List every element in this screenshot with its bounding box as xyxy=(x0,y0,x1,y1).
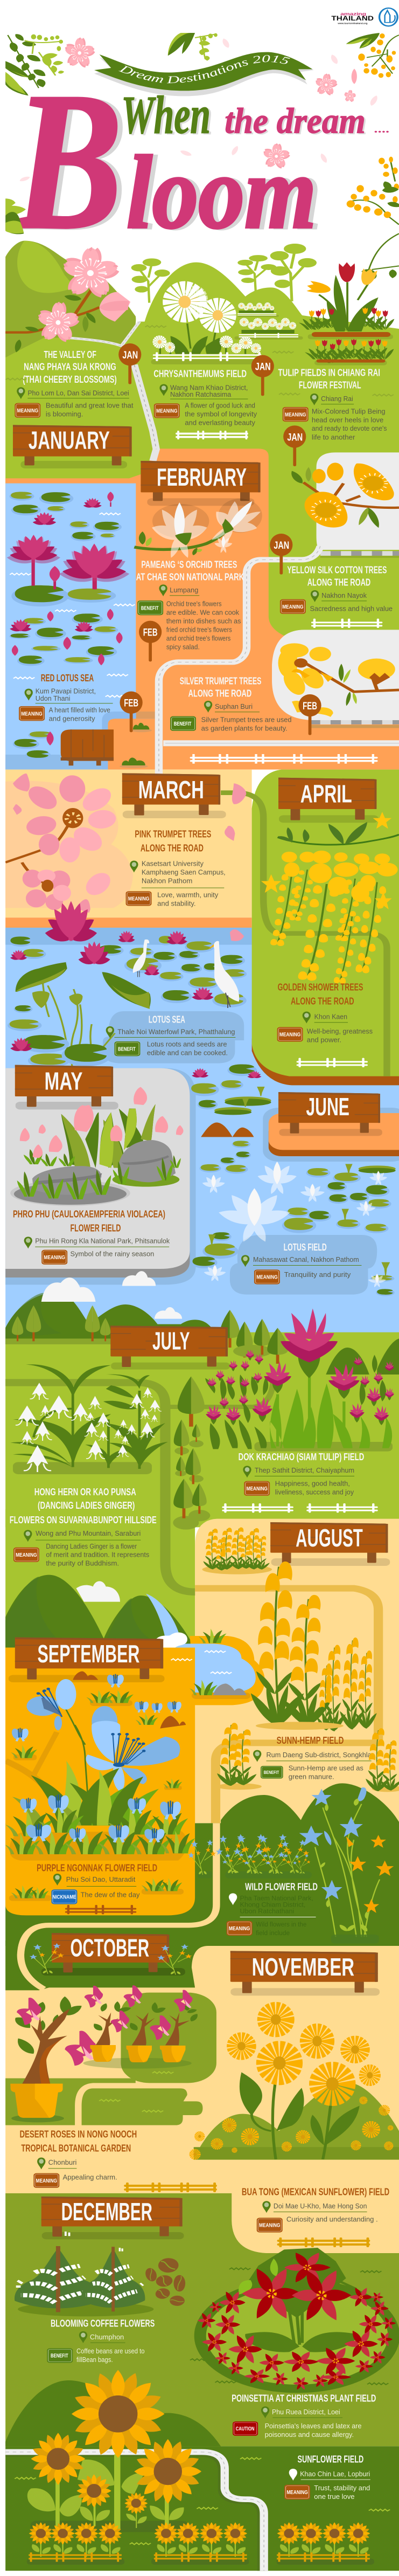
icon: silver trumpet flowers xyxy=(278,643,399,706)
meaning: red lotus: A heart filled with love xyxy=(49,706,110,714)
heading: ginger: (DANCING LADIES GINGER) xyxy=(38,1500,135,1511)
month pin: JAN: JAN xyxy=(274,540,289,551)
fence: brown xyxy=(65,1905,136,1914)
sign: May: MAY xyxy=(44,1068,82,1095)
sign: March xyxy=(122,773,226,818)
icon: poinsettia wreath xyxy=(198,2248,396,2391)
meaning: chrysanthemums: A flower of good luck and xyxy=(185,402,255,410)
benefit: silver trumpet: BENEFIT xyxy=(174,721,192,727)
benefit: coffee: Coffee beans are used to xyxy=(76,2347,145,2355)
fence xyxy=(176,431,248,439)
panel: October and November: DESERT ROSES IN NONG NOOCH xyxy=(19,2129,137,2140)
sign: September: SEPTEMBER xyxy=(38,1640,139,1668)
benefit: orchid: BENEFIT xyxy=(141,605,159,611)
sign: February: FEBRUARY xyxy=(157,464,247,491)
logo: Amazing Thailand: www.tourismthailand.org xyxy=(337,22,368,24)
location: wild flower: Pha Taem National Park, xyxy=(240,1895,313,1902)
location: orchid xyxy=(159,584,199,596)
panel: lotus sea text: BENEFIT xyxy=(118,1046,136,1052)
location: sunn hemp xyxy=(253,1750,372,1762)
panel: February: SILVER TRUMPET TREES xyxy=(180,675,261,686)
location: poinsettia: Phu Ruea District, Loei xyxy=(272,2408,340,2416)
location: ngonnak xyxy=(53,1874,136,1887)
panel: August xyxy=(9,1522,390,1733)
meaning: desert roses: MEANING xyxy=(36,2178,57,2184)
sign: June xyxy=(278,1092,382,1136)
sign: May xyxy=(15,1065,118,1109)
icon: decor waves xyxy=(190,2268,388,2385)
meaning: chrysanthemums xyxy=(154,402,257,427)
panel: May and June xyxy=(9,1065,396,1319)
location: coffee xyxy=(79,2331,125,2343)
leaves: mid left xyxy=(5,198,26,234)
logo: seal xyxy=(380,8,397,26)
meaning: sunflower: Trust, stability and xyxy=(314,2484,370,2492)
location: wild flower: Ubon Ratchathani xyxy=(240,1908,294,1915)
heading: pink trumpet xyxy=(135,828,211,853)
benefit: silver trumpet: as garden plants for beauty. xyxy=(201,724,288,733)
panel: Sunflower xyxy=(3,2370,390,2573)
leaves: top left xyxy=(5,33,65,95)
location: chrysanthemums: Wang Nam Khiao District, xyxy=(170,383,248,392)
sign: March: MARCH xyxy=(138,776,204,804)
panel: March and April xyxy=(5,773,399,1079)
location: ngonnak: Phu Soi Dao, Uttaradit xyxy=(66,1875,136,1883)
icon: siam tulips xyxy=(205,1309,394,1452)
title: When the dream xyxy=(123,95,389,135)
location: silver trumpet: Suphan Buri xyxy=(215,702,253,710)
location: pink trumpet: Kasetsart University xyxy=(142,860,204,868)
title: Bloom: B xyxy=(17,52,128,271)
location: phro phu: Phu Hin Rong Kla National Park, Phitsanulok xyxy=(35,1237,170,1245)
location: desert roses: Chonburi xyxy=(48,2158,76,2166)
icon: sunflower rows xyxy=(27,2522,374,2565)
heading: ginger: HONG HERN OR KAO PUNSA xyxy=(34,1486,136,1497)
benefit: sunn hemp: BENEFIT xyxy=(264,1770,279,1776)
meaning: bua tong xyxy=(257,2215,378,2233)
icon: decor waves xyxy=(15,2457,390,2545)
icon: wooden dock xyxy=(61,729,114,765)
road xyxy=(3,2452,264,2573)
heading: ginger xyxy=(10,1486,157,1525)
icon: big sunflowers xyxy=(27,2370,201,2532)
location: desert roses xyxy=(37,2158,76,2170)
location: valley: Pho Lom Lo, Dan Sai District, Loei xyxy=(27,389,129,397)
benefit: orchid: and orchid tree's flowers xyxy=(166,634,230,643)
sign: August xyxy=(270,1522,390,1566)
heading: silk cotton xyxy=(287,564,387,588)
sign: February xyxy=(141,461,261,506)
location: golden shower: Khon Kaen xyxy=(314,1013,347,1021)
fence: gold xyxy=(124,2183,217,2192)
heading: tulips xyxy=(278,369,380,388)
benefit: orchid: fried orchid tree's flowers xyxy=(166,625,232,634)
meaning: pink trumpet xyxy=(126,891,219,908)
meaning: phro phu: Symbol of the rainy season xyxy=(70,1250,154,1258)
benefit: coffee: BENEFIT xyxy=(51,2353,68,2359)
icon: clouds xyxy=(41,1271,182,1319)
month pin: JAN xyxy=(118,343,141,384)
icon: sunn hemp large xyxy=(247,1562,378,1733)
panel: lotus field text: LOTUS FIELD xyxy=(284,1241,327,1253)
icon: trees xyxy=(12,1306,288,1530)
meaning: silk cotton xyxy=(280,599,393,614)
icon: waves xyxy=(99,2071,173,2112)
icon: pink blossom xyxy=(65,37,95,68)
location: phro phu xyxy=(24,1237,170,1248)
panel: January xyxy=(5,244,394,468)
meaning: red lotus: MEANING xyxy=(21,710,43,717)
benefit: orchid: them into dishes such as xyxy=(166,617,241,625)
title: When the dream: When xyxy=(121,85,211,144)
icon: grass and small blue flowers xyxy=(5,1745,195,1861)
location: silver trumpet xyxy=(204,701,260,713)
meaning: pink trumpet: and stability. xyxy=(157,900,196,908)
meaning: ginger: MEANING xyxy=(16,1552,37,1558)
location: coffee: Chumphon xyxy=(90,2333,124,2341)
meaning: desert roses: Appealing charm. xyxy=(63,2173,117,2181)
heading: phro phu xyxy=(13,1208,165,1233)
panel: lotus sea text: Lotus roots and seeds are xyxy=(147,1040,227,1048)
month pin: FEB: FEB xyxy=(143,627,158,639)
location: red lotus: Kum Pavapi District, xyxy=(36,687,96,695)
panel: September xyxy=(5,1679,399,1944)
heading: valley: THE VALLEY OF xyxy=(44,349,96,360)
meaning: tulips xyxy=(283,407,387,441)
meaning: ginger: Dancing Ladies Ginger is a flower xyxy=(46,1542,137,1550)
meaning: silk cotton: MEANING xyxy=(282,604,304,610)
meaning: dok krachiao: liveliness, success and joy xyxy=(275,1488,354,1496)
month pin: FEB: FEB xyxy=(124,697,138,709)
meaning: ginger xyxy=(13,1542,149,1567)
month pin: FEB xyxy=(120,692,143,732)
panel: lotus field text: Tranquility and purity xyxy=(284,1270,351,1279)
meaning: dok krachiao: Happiness, good health, xyxy=(275,1480,350,1488)
benefit: sunn hemp: green manure. xyxy=(289,1773,334,1781)
panel: February xyxy=(6,461,399,775)
icon: pink trumpet tree xyxy=(5,774,246,941)
leaves: mid right yellow branch xyxy=(347,157,399,282)
meaning: dok krachiao xyxy=(244,1480,354,1496)
location: wild flower xyxy=(229,1893,316,1917)
meaning: ginger: the purity of Buddhism. xyxy=(46,1559,119,1567)
month pin: JAN xyxy=(251,355,274,396)
meaning: ginger: of merit and tradition. It represents xyxy=(46,1551,149,1559)
location: tulips: Chiang Rai xyxy=(321,395,353,403)
title: Bloom xyxy=(19,97,318,231)
fence xyxy=(311,619,382,628)
meaning: golden shower: MEANING xyxy=(279,1032,300,1038)
month pin: JAN: JAN xyxy=(255,361,271,373)
panel: lotus sea text xyxy=(106,1013,235,1057)
meaning: golden shower xyxy=(277,1027,373,1044)
month pin: JAN xyxy=(283,425,306,466)
benefit: orchid: spicy salad. xyxy=(166,643,200,651)
ribbon banner with heading: Dream Destinations 2015 xyxy=(118,55,290,83)
path xyxy=(221,793,387,1076)
panel: September: WILD FLOWER FIELD xyxy=(245,1881,318,1893)
caution: poinsettia: CAUTION xyxy=(236,2426,255,2432)
nickname: ngonnak: The dew of the day xyxy=(81,1890,140,1899)
location: silk cotton: Nakhon Nayok xyxy=(321,591,367,599)
fence: gold xyxy=(277,2237,370,2247)
panel: December: BLOOMING COFFEE FLOWERS xyxy=(51,2318,155,2329)
panel: December xyxy=(15,2158,396,2391)
benefit: silver trumpet xyxy=(170,716,291,733)
location: tulips xyxy=(310,393,354,405)
nickname: ngonnak xyxy=(51,1889,140,1904)
benefit: silver trumpet: Silver Trumpet trees are used xyxy=(201,716,291,724)
heading: valley: NANG PHAYA SUA KRONG xyxy=(24,361,116,372)
icon: cherry blossom branch xyxy=(5,244,130,353)
heading: desert roses: TROPICAL BOTANICAL GARDEN xyxy=(21,2143,131,2154)
meaning: chrysanthemums: MEANING xyxy=(156,408,177,414)
panel: lotus field text xyxy=(241,1241,361,1284)
road xyxy=(68,322,156,461)
location: poinsettia xyxy=(261,2406,342,2418)
meaning: red lotus xyxy=(19,706,110,723)
header decoration xyxy=(5,33,399,304)
panel: March and April: PINK TRUMPET TREES xyxy=(135,828,211,839)
month pin: FEB xyxy=(139,621,162,661)
logo: Amazing Thailand: amazing xyxy=(340,11,366,17)
location: pink trumpet xyxy=(130,860,226,888)
heading: silver trumpet xyxy=(180,675,261,699)
benefit: orchid: are edible. We can cook xyxy=(166,608,240,617)
meaning: red lotus: and generosity xyxy=(49,715,95,723)
fence xyxy=(297,1058,368,1067)
title: Bloom: B xyxy=(12,52,123,271)
icon: phro phu flowers on rocks xyxy=(9,1087,184,1206)
icon: purple ngonnak flowers xyxy=(86,1674,186,1729)
caution: poinsettia: poisonous and cause allergy. xyxy=(265,2430,354,2439)
sign: January: JANUARY xyxy=(29,426,110,454)
nickname: ngonnak: NICKNAME xyxy=(52,1894,76,1900)
meaning: chrysanthemums: and everlasting beauty xyxy=(185,419,255,427)
meaning: valley: MEANING xyxy=(17,408,38,413)
location: pink trumpet: Nakhon Pathom xyxy=(142,877,192,885)
ribbon banner with heading xyxy=(94,52,313,96)
icon: petals and month pin xyxy=(292,694,333,735)
icon: small chrysanthemum rows xyxy=(237,303,298,338)
icon: large blue flowers xyxy=(11,1679,180,1797)
icon: trees xyxy=(131,244,317,303)
road xyxy=(159,546,320,775)
location: orchid: Lumpang xyxy=(170,586,198,594)
meaning: tulips: life to another xyxy=(312,433,355,441)
icon: sunn hemp small field xyxy=(202,1528,272,1574)
leaves: top centre xyxy=(168,33,218,61)
icon: chrysanthemums xyxy=(151,289,303,364)
icon: desert roses xyxy=(10,1985,200,2122)
location: ginger: Wong and Phu Mountain, Saraburi xyxy=(36,1529,141,1537)
location: chrysanthemums: Nakhon Ratchasima xyxy=(170,390,232,398)
logo: Amazing Thailand: THAILAND xyxy=(331,15,374,22)
heading: desert roses xyxy=(19,2129,137,2154)
sign: September xyxy=(9,1638,165,1682)
meaning: sunflower: MEANING xyxy=(286,2489,308,2495)
sign: October xyxy=(30,1933,192,1976)
icon: pond decorations xyxy=(73,1628,250,1699)
panel: lotus sea text: Thale Noi Waterfowl Park, Phatthalung xyxy=(117,1027,235,1036)
icon: grass tufts xyxy=(9,1878,184,1901)
icon: wild flowers small field xyxy=(188,1834,312,1879)
icon: petals and month pin: FEB xyxy=(303,700,317,712)
location: valley xyxy=(17,387,129,399)
meaning: pink trumpet: Love, warmth, unity xyxy=(157,891,219,899)
icon: lotus field pads xyxy=(190,1080,396,1296)
location: wild flower: Khong Chiam District, xyxy=(240,1902,305,1909)
logo: Amazing Thailand xyxy=(331,11,374,24)
icon: egret large xyxy=(208,941,239,1008)
leaves: top right xyxy=(346,33,399,78)
sign: December: DECEMBER xyxy=(61,2198,152,2226)
benefit: sunn hemp xyxy=(261,1764,363,1781)
icon: coffee beans xyxy=(144,2256,186,2306)
panel: July: FLOWERS ON SUVARNABUNPOT HILLSIDE xyxy=(10,1514,157,1525)
panel: lotus field text: MEANING xyxy=(256,1274,278,1280)
meaning: tulips: MEANING xyxy=(285,411,306,418)
location: red lotus xyxy=(25,687,113,703)
heading: golden shower xyxy=(278,981,363,1006)
heading: pink trumpet: ALONG THE ROAD xyxy=(141,842,204,853)
meaning: wild flower: MEANING xyxy=(229,1925,250,1931)
heading: orchid xyxy=(136,558,244,583)
panel: January: CHRYSANTHEMUMS FIELD xyxy=(153,368,247,379)
sign: July xyxy=(110,1325,230,1370)
meaning: desert roses xyxy=(33,2173,117,2188)
meaning: valley xyxy=(15,403,134,418)
heading: valley xyxy=(23,349,117,385)
fences xyxy=(222,1503,378,1513)
location: chrysanthemums xyxy=(159,383,248,399)
location: red lotus: Udon Thani xyxy=(36,694,70,702)
location: sunflower xyxy=(289,2469,370,2481)
panel: lotus sea text: edible and can be cooked. xyxy=(147,1049,228,1057)
sign: January xyxy=(13,425,132,468)
sign: November xyxy=(230,1951,380,1995)
sign: October: OCTOBER xyxy=(70,1934,149,1962)
sign: July: JULY xyxy=(152,1327,190,1355)
location: ginger xyxy=(24,1529,141,1542)
heading: phro phu: FLOWER FIELD xyxy=(70,1222,121,1233)
meaning: valley: is blooming. xyxy=(46,410,83,418)
panel: July xyxy=(10,1306,394,1567)
sign: April xyxy=(278,778,379,823)
location: bua tong xyxy=(262,2201,367,2213)
icon: mexican sunflowers xyxy=(192,2008,399,2160)
meaning: phro phu: MEANING xyxy=(44,1254,65,1260)
panel: lotus sea text: LOTUS SEA xyxy=(149,1013,185,1025)
location: pink trumpet: Kamphaeng Saen Campus, xyxy=(142,868,226,876)
benefit: orchid: Orchid tree's flowers xyxy=(166,599,222,608)
month pin: JAN: JAN xyxy=(287,431,303,443)
caution: poinsettia xyxy=(233,2421,361,2439)
meaning: golden shower: and power. xyxy=(307,1035,341,1044)
heading: orchid: PAMEANG ‘S ORCHID TREES xyxy=(141,558,237,570)
benefit: coffee: fillBean bags. xyxy=(76,2356,113,2364)
icon: wild flowers large xyxy=(299,1787,394,1944)
benefit: orchid xyxy=(137,599,241,651)
location: golden shower xyxy=(303,1012,348,1024)
meaning: pink trumpet: MEANING xyxy=(128,896,149,902)
panel: February: RED LOTUS SEA xyxy=(41,672,94,683)
panel: February: AT CHAE SON NATIONAL PARK xyxy=(136,571,244,583)
month pin: JAN xyxy=(270,534,292,575)
panel: October and November xyxy=(10,1933,399,2160)
icon: falling petals xyxy=(18,38,379,182)
meaning: bua tong: MEANING xyxy=(259,2222,280,2228)
meaning: chrysanthemums: the symbol of longevity xyxy=(185,410,257,418)
icon: golden shower tree xyxy=(261,812,399,984)
icon: orchid tree flowers xyxy=(134,493,274,560)
panel: January: (THAI CHEERY BLOSSOMS) xyxy=(23,374,117,385)
icon: coffee plants xyxy=(15,2232,153,2316)
icon: sunn hemp sides xyxy=(215,1723,399,1792)
meaning: sunflower xyxy=(284,2484,370,2501)
meaning: wild flower: field include xyxy=(256,1930,290,1937)
title: When the dream: .... xyxy=(374,123,390,135)
icon: decor waves xyxy=(6,326,394,396)
icon: lotus sea plants xyxy=(8,901,262,1079)
meaning: sunflower: one true love xyxy=(314,2492,355,2501)
meaning: wild flower xyxy=(227,1921,306,1937)
road: crossing xyxy=(163,740,399,746)
panel: May and June: PHRO PHU (CAULOKAEMPFERIA VIOLACEA) xyxy=(13,1208,165,1219)
panel: September: PURPLE NGONNAK FLOWER FIELD xyxy=(37,1862,157,1874)
fence: long xyxy=(190,754,378,764)
icon: egret small xyxy=(133,940,149,977)
location: silk cotton xyxy=(311,590,367,602)
heading: silver trumpet: ALONG THE ROAD xyxy=(188,688,251,699)
sign: December xyxy=(41,2197,184,2239)
icon: yellow silk cotton xyxy=(288,462,399,529)
icon: bushes xyxy=(120,723,152,768)
location: dok krachiao xyxy=(243,1466,354,1477)
benefit: coffee xyxy=(47,2347,145,2364)
meaning: phro phu xyxy=(41,1250,154,1265)
meaning: valley: Beautiful and great love that xyxy=(46,402,134,410)
title: When the dream: When xyxy=(123,86,213,146)
benefit: sunn hemp: Sunn-Hemp are used as xyxy=(289,1764,363,1772)
icon: dancing ladies ginger xyxy=(10,1364,168,1474)
month pin: JAN: JAN xyxy=(122,349,138,361)
icon: lotus pond xyxy=(6,492,135,759)
meaning: wild flower: Wild flowers in the xyxy=(256,1921,306,1928)
icon: tulips xyxy=(299,262,394,365)
meaning: dok krachiao: MEANING xyxy=(247,1486,268,1491)
